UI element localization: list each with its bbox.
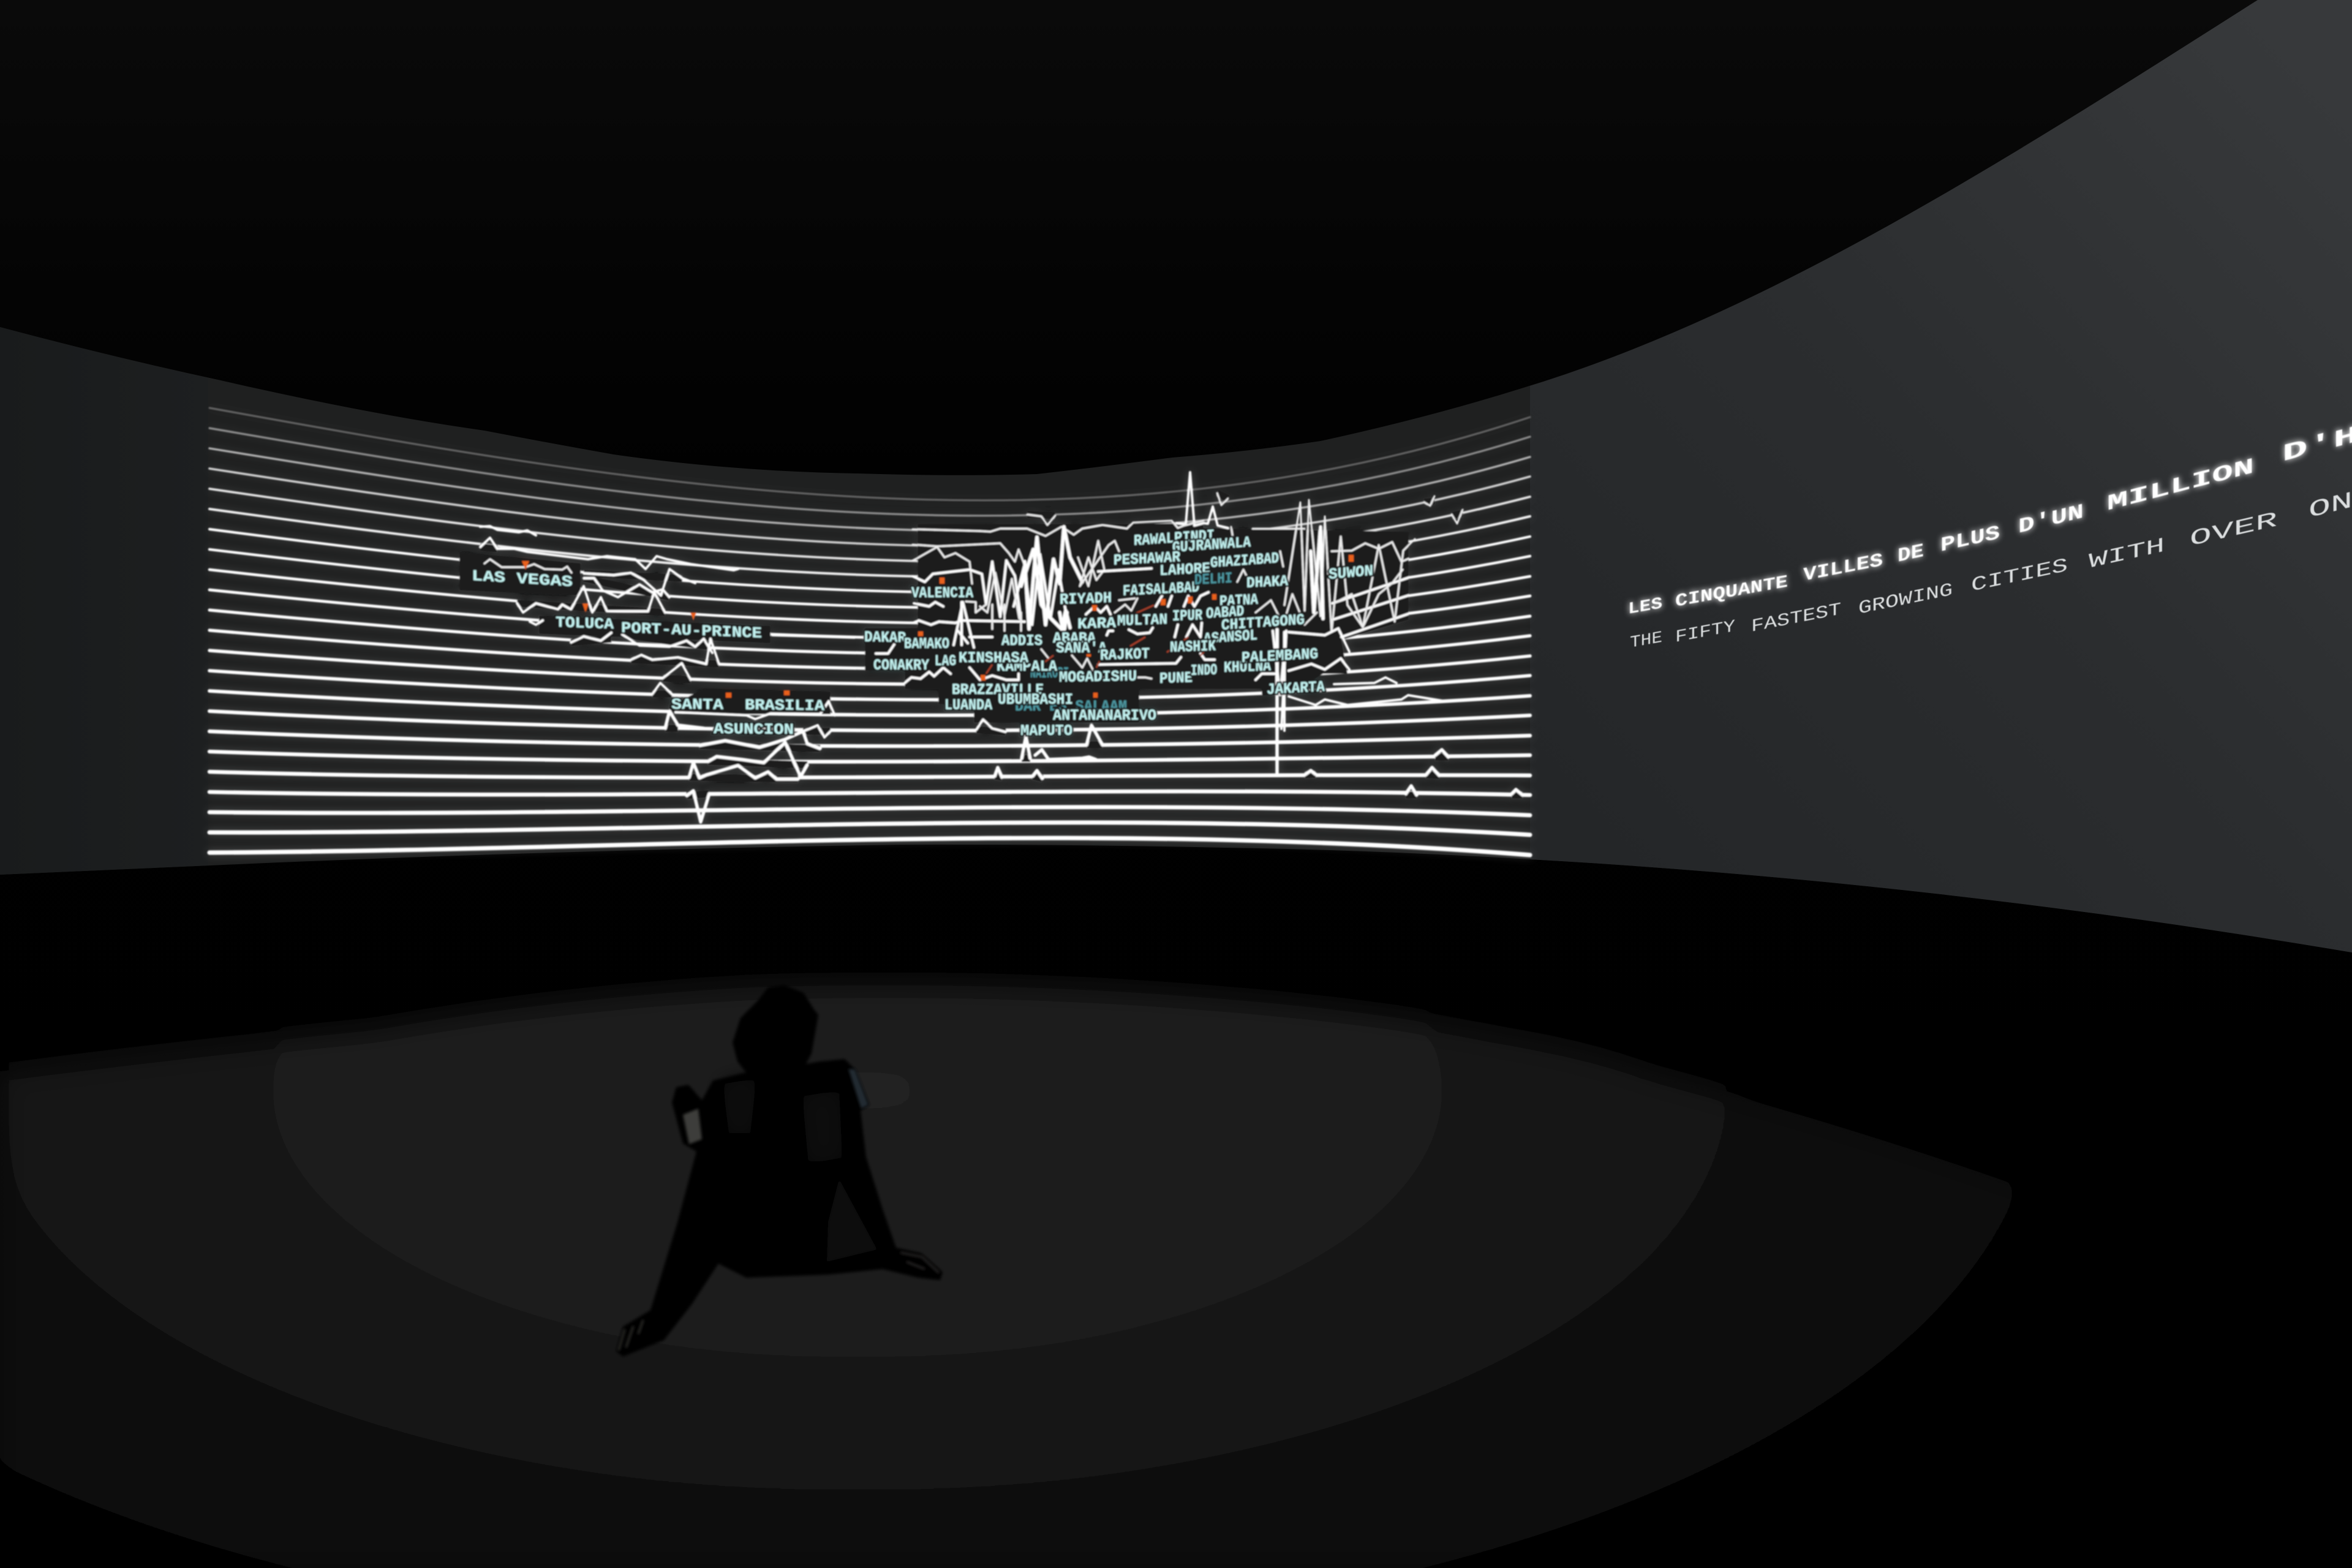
label: Rawalpindi: RAWALPINDI bbox=[1134, 527, 1215, 550]
heading on the right screen: French title: MILLION bbox=[2107, 454, 2254, 517]
label: Pune: PUNE bbox=[1159, 669, 1193, 688]
subtitle on the right screen: English title bbox=[1630, 488, 2352, 653]
label: Bamako: BAMAKO bbox=[904, 635, 949, 653]
label: Port-au-Prince: PORT-AU-PRINCE bbox=[621, 619, 762, 643]
label: Rajkot: RAJKOT bbox=[1100, 645, 1150, 665]
label: Lahore: LAHORE bbox=[1159, 560, 1210, 580]
subtitle on the right screen: English title: OVER bbox=[2190, 507, 2277, 552]
spikes: Americas bbox=[480, 526, 854, 822]
spikes: southern lines bbox=[976, 720, 1530, 795]
label: Patna: PATNA bbox=[1219, 591, 1258, 611]
label: Riyadh: RIYADH bbox=[1060, 589, 1112, 609]
heading on the right screen: French title: LES bbox=[1628, 594, 1662, 619]
label: Maputo: MAPUTO bbox=[1020, 722, 1072, 740]
shirt highlight left bbox=[723, 1078, 756, 1133]
subtitle on the right screen: English title: GROWING bbox=[1858, 580, 1953, 620]
label: Sana'a: SANA'A bbox=[1056, 639, 1107, 657]
shirt highlight right bbox=[802, 1090, 842, 1164]
label: Santa: SANTA bbox=[671, 696, 723, 714]
seated person silhouette bbox=[616, 985, 943, 1357]
orange city markers and red traces bbox=[522, 555, 1354, 698]
right screen panel bbox=[1530, 0, 2352, 952]
label: Ababa: ABABA bbox=[1053, 630, 1096, 647]
spikes: Rawalpindi peak bbox=[1177, 472, 1228, 528]
label: Faisalabad: FAISALABAD bbox=[1123, 578, 1199, 600]
subtitle on the right screen: English title: ON bbox=[2309, 488, 2352, 525]
label: Conakry: CONAKRY bbox=[873, 657, 929, 674]
heading on the right screen: French title: CINQUANTE bbox=[1675, 572, 1788, 612]
heading on the right screen: French title: VILLES bbox=[1803, 550, 1883, 587]
heading on the right screen: French title: D'UN bbox=[2018, 500, 2084, 540]
city labels on the map bbox=[472, 527, 1373, 740]
projected data chart: horizontal lines map of fastest growing cities bbox=[209, 408, 1530, 855]
spikes: top lines over Eurasia bbox=[1027, 493, 1463, 525]
label: Brasilia: BRASILIA bbox=[745, 696, 824, 715]
horizontal scan lines bbox=[209, 408, 1530, 855]
label: Jaipur: IPUR bbox=[1172, 606, 1202, 625]
label: Nairobi: NAIROBI bbox=[1030, 665, 1069, 682]
label: Kinshasa: KINSHASA bbox=[959, 649, 1028, 667]
label: Lagos: LAG bbox=[935, 652, 956, 670]
dark gaps in lines around spikes and label clusters bbox=[463, 493, 1523, 796]
label: Suwon: SUWON bbox=[1329, 562, 1373, 584]
right hand highlights bbox=[900, 1253, 939, 1273]
shoe detail bbox=[683, 1109, 702, 1144]
label: Dakar: DAKAR bbox=[864, 628, 906, 647]
shadow gap between right arm and torso bbox=[827, 1179, 877, 1262]
label: Delhi: DELHI bbox=[1194, 570, 1232, 589]
label: Mogadishu: MOGADISHU bbox=[1059, 668, 1137, 687]
label: Multan: MULTAN bbox=[1117, 611, 1167, 630]
label: Dhaka: DHAKA bbox=[1246, 572, 1288, 592]
subtitle on the right screen: English title: CITIES bbox=[1971, 554, 2068, 597]
label: Gujranwala: GUJRANWALA bbox=[1172, 533, 1251, 557]
heading on the right screen: French title: DE bbox=[1898, 540, 1924, 568]
label: Asuncion: ASUNCION bbox=[714, 720, 794, 739]
left screen panel bbox=[0, 327, 208, 875]
body silhouette bbox=[616, 985, 943, 1357]
label: Hyderabad fragment: OABAD bbox=[1206, 603, 1244, 623]
subtitle on the right screen: English title: FIFTY bbox=[1675, 617, 1735, 647]
label: Nashik: NASHIK bbox=[1170, 637, 1216, 657]
label: Indore: INDO bbox=[1191, 662, 1217, 680]
label: Kampala: KAMPALA bbox=[997, 658, 1057, 676]
label: Las Vegas: LAS VEGAS bbox=[472, 567, 573, 591]
spikes: Africa, Middle East and Asia cluster bbox=[876, 521, 1305, 683]
left hand highlights bbox=[619, 1320, 643, 1351]
label: Asansol: ASANSOL bbox=[1204, 627, 1257, 648]
label: Khulna: KHULNA bbox=[1224, 657, 1271, 677]
subtitle on the right screen: English title: THE bbox=[1630, 628, 1662, 653]
label: Ghaziabad: GHAZIABAD bbox=[1210, 549, 1279, 572]
spike: Jakarta vertical bbox=[1273, 630, 1286, 773]
heading on the right screen: French title: PLUS bbox=[1940, 522, 2000, 558]
label: Addis: ADDIS bbox=[1001, 632, 1042, 650]
spikes: South-East Asia cluster bbox=[1256, 500, 1442, 705]
label: Chittagong: CHITTAGONG bbox=[1221, 611, 1305, 635]
label: Palembang: PALEMBANG bbox=[1242, 645, 1318, 667]
floor bbox=[0, 985, 2352, 1568]
label: Antananarivo: ANTANANARIVO bbox=[1053, 707, 1156, 725]
label: Peshawar: PESHAWAR bbox=[1114, 548, 1180, 570]
label: Karachi: KARA bbox=[1077, 614, 1116, 633]
label: Jakarta: JAKARTA bbox=[1267, 678, 1325, 699]
heading on the right screen: French title bbox=[1628, 421, 2352, 619]
shirt sleeve rim bbox=[848, 1069, 869, 1109]
label: Valencia: VALENCIA bbox=[911, 584, 973, 602]
subtitle on the right screen: English title: WITH bbox=[2089, 534, 2165, 575]
label: Brazzaville: BRAZZAVILLE bbox=[952, 681, 1044, 699]
heading on the right screen: French title: D'H bbox=[2282, 421, 2352, 469]
label: Luanda: LUANDA bbox=[944, 696, 992, 714]
subtitle on the right screen: English title: FASTEST bbox=[1751, 600, 1841, 637]
label: Dar es Salaam: DAR ES SALAAM bbox=[1015, 698, 1127, 715]
panoramic projection screen bbox=[0, 0, 2352, 952]
label: Toluca: TOLUCA bbox=[556, 614, 614, 633]
label: Lubumbashi: UBUMBASHI bbox=[998, 691, 1073, 709]
